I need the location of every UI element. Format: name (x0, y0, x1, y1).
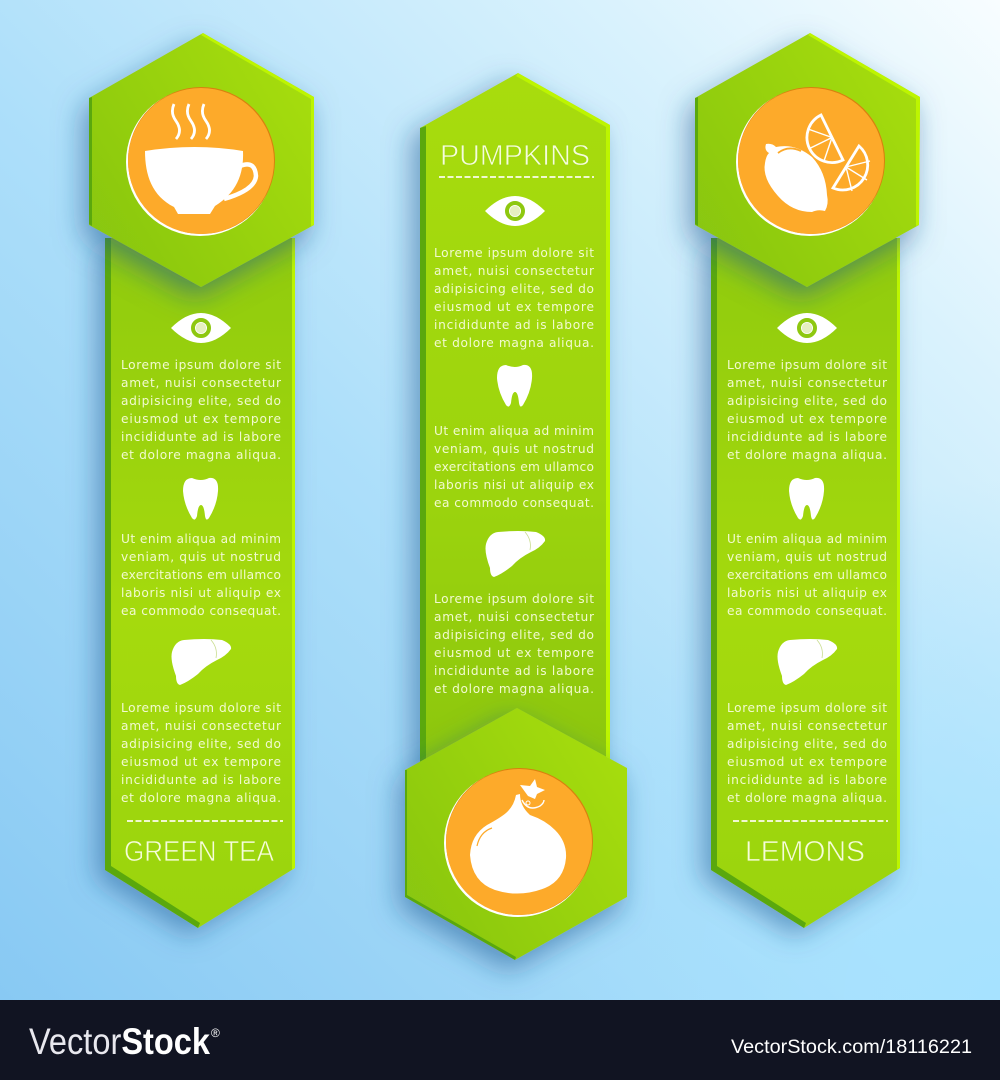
icon: liver (172, 639, 231, 685)
icon: eye (777, 313, 837, 343)
text block: first paragraph: et dolore magna aliqua. (121, 448, 281, 462)
text block: second paragraph: laboris nisi ut aliquip ex (121, 586, 281, 600)
text block: second paragraph (727, 532, 887, 618)
text block: first paragraph: eiusmod ut ex tempore (727, 412, 887, 426)
icon: pumpkin in orange circle (444, 768, 593, 917)
text block: second paragraph: veniam, quis ut nostrud (121, 550, 281, 564)
text block: second paragraph: ea commodo consequat. (434, 496, 594, 510)
text block: second paragraph: Ut enim aliqua ad minim (121, 532, 281, 546)
text block: first paragraph: adipisicing elite, sed do (434, 282, 594, 296)
text block: second paragraph: Ut enim aliqua ad minim (434, 424, 594, 438)
heading: pumpkins: PUMPKINS (440, 140, 590, 172)
text block: third paragraph (121, 701, 282, 805)
text block: second paragraph (121, 532, 281, 618)
text block: third paragraph (727, 701, 888, 805)
text block: first paragraph: Loreme ipsum dolore sit (434, 246, 594, 260)
heading: green tea: GREEN TEA (124, 836, 274, 868)
text block: third paragraph: adipisicing elite, sed do (434, 628, 594, 642)
text block: second paragraph: exercitations em ullamco (434, 460, 594, 474)
icon: eye (485, 196, 545, 226)
text block: first paragraph: amet, nuisi consectetur (434, 264, 595, 278)
text block: first paragraph: adipisicing elite, sed do (121, 394, 281, 408)
panel: pumpkins (405, 73, 627, 960)
text block: third paragraph: Loreme ipsum dolore sit (434, 592, 594, 606)
hexagon: pumpkins (405, 708, 627, 960)
text block: first paragraph: eiusmod ut ex tempore (121, 412, 281, 426)
text block: third paragraph: amet, nuisi consectetur (727, 719, 888, 733)
icon: eye (171, 313, 231, 343)
logo: VectorStock: VectorStock (29, 1021, 210, 1062)
text block: third paragraph: Loreme ipsum dolore sit (121, 701, 281, 715)
text block: third paragraph: eiusmod ut ex tempore (727, 755, 887, 769)
text block: third paragraph: adipisicing elite, sed do (727, 737, 887, 751)
footer bar (0, 1000, 1000, 1080)
panel: green tea (89, 33, 314, 928)
text block: second paragraph: Ut enim aliqua ad minim (727, 532, 887, 546)
text block: first paragraph: Loreme ipsum dolore sit (121, 358, 281, 372)
icon: tooth (497, 365, 532, 407)
icon: lemon in orange circle (736, 87, 885, 236)
footer URL: VectorStock.com/18116221 (731, 1037, 972, 1058)
text block: first paragraph: eiusmod ut ex tempore (434, 300, 594, 314)
text block: first paragraph (121, 358, 282, 462)
text block: first paragraph (727, 358, 888, 462)
text block: third paragraph: incididunte ad is labore (727, 773, 887, 787)
text block: first paragraph (434, 246, 595, 350)
hexagon: lemons (695, 33, 920, 287)
text block: second paragraph: exercitations em ullamco (727, 568, 887, 582)
text block: third paragraph: et dolore magna aliqua. (727, 791, 887, 805)
ribbon: pumpkins (420, 73, 610, 770)
heading: lemons: LEMONS (745, 836, 865, 868)
text block: third paragraph: eiusmod ut ex tempore (434, 646, 594, 660)
text block: first paragraph: incididunte ad is labore (434, 318, 594, 332)
text block: third paragraph (434, 592, 595, 696)
panel: lemons (695, 33, 920, 928)
icon: tooth (789, 478, 824, 520)
text block: second paragraph: veniam, quis ut nostrud (727, 550, 887, 564)
text block: third paragraph: et dolore magna aliqua. (121, 791, 281, 805)
text block: first paragraph: et dolore magna aliqua. (434, 336, 594, 350)
text block: first paragraph: incididunte ad is labore (121, 430, 281, 444)
text block: third paragraph: amet, nuisi consectetur (434, 610, 595, 624)
icon: liver (778, 639, 837, 685)
text block: first paragraph: amet, nuisi consectetur (121, 376, 282, 390)
text block: third paragraph: et dolore magna aliqua. (434, 682, 594, 696)
logo: registered mark: ® (211, 1026, 220, 1040)
text block: second paragraph: laboris nisi ut aliquip ex (727, 586, 887, 600)
text block: third paragraph: eiusmod ut ex tempore (121, 755, 281, 769)
ribbon: green tea (105, 238, 295, 928)
text block: second paragraph: ea commodo consequat. (121, 604, 281, 618)
text block: second paragraph: ea commodo consequat. (727, 604, 887, 618)
icon: liver (486, 531, 545, 577)
text block: first paragraph: adipisicing elite, sed do (727, 394, 887, 408)
text block: first paragraph: incididunte ad is labore (727, 430, 887, 444)
text block: second paragraph: veniam, quis ut nostrud (434, 442, 594, 456)
text block: second paragraph: exercitations em ullamco (121, 568, 281, 582)
ribbon: lemons (711, 238, 900, 928)
text block: third paragraph: Loreme ipsum dolore sit (727, 701, 887, 715)
icon: tooth (183, 478, 218, 520)
icon: tea cup in orange circle (126, 87, 275, 236)
text block: second paragraph: laboris nisi ut aliquip ex (434, 478, 594, 492)
text block: first paragraph: amet, nuisi consectetur (727, 376, 888, 390)
text block: third paragraph: incididunte ad is labore (434, 664, 594, 678)
text block: third paragraph: adipisicing elite, sed do (121, 737, 281, 751)
text block: second paragraph (434, 424, 594, 510)
text block: first paragraph: et dolore magna aliqua. (727, 448, 887, 462)
hexagon: green tea (89, 33, 314, 287)
text block: third paragraph: amet, nuisi consectetur (121, 719, 282, 733)
text block: third paragraph: incididunte ad is labore (121, 773, 281, 787)
text block: first paragraph: Loreme ipsum dolore sit (727, 358, 887, 372)
